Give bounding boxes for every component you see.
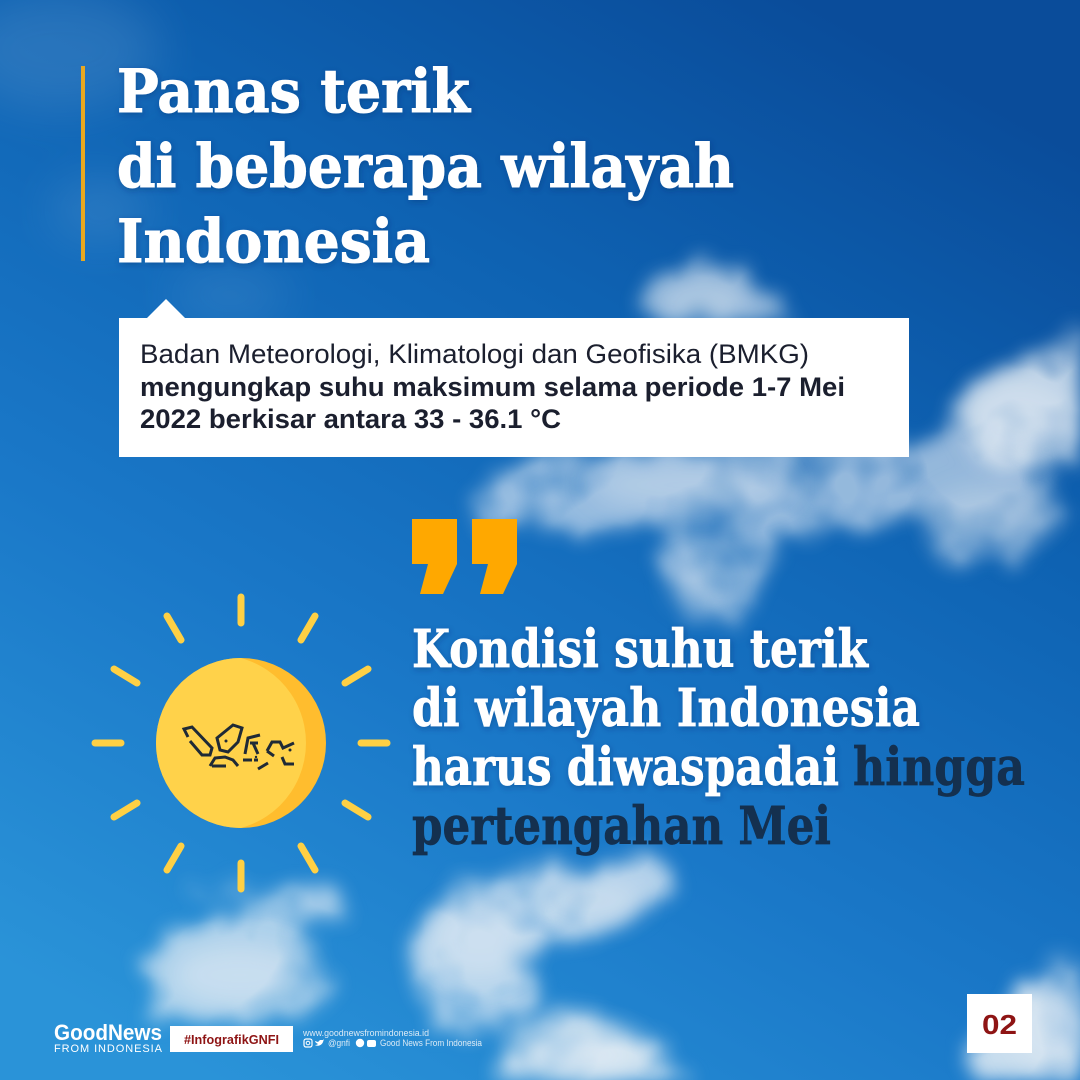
logo: GoodNews From Indonesia [54,1020,163,1055]
sun disc [156,658,326,828]
footer [54,1020,482,1055]
title [117,57,734,277]
quote text: pertengahan Mei [412,796,831,857]
hashtag badge: #InfografikGNFI [184,1032,279,1047]
logo: GoodNews From Indonesia: GoodNews [54,1020,162,1045]
callout text: Badan Meteorologi, Klimatologi dan Geofisika (BMKG) [140,339,809,369]
callout pointer [147,299,185,318]
quote text: di wilayah Indonesia [412,678,920,739]
title accent bar [81,66,85,261]
quote text: hingga [853,737,1025,798]
map dots [224,740,292,758]
sun rays [95,597,387,889]
hashtag badge [170,1026,293,1052]
logo: GoodNews From Indonesia: FROM INDONESIA [54,1043,163,1055]
website and social links: @gnfi [328,1038,350,1048]
callout text: mengungkap suhu maksimum selama periode 1-7 Mei [140,372,845,402]
quote text [412,619,1025,857]
icon: quotation marks [412,519,517,594]
title: Panas terik [117,57,471,127]
callout box [119,299,909,457]
callout panel [119,318,909,457]
page number: 02 [982,1009,1017,1040]
title: Indonesia [117,207,430,277]
title: di beberapa wilayah [117,132,734,202]
callout text [140,339,845,434]
website and social links: www.goodnewsfromindonesia.id [302,1028,429,1038]
callout text: 2022 berkisar antara 33 - 36.1 °C [140,404,561,434]
website and social links [302,1028,482,1048]
icon: sun with Indonesia map [95,597,387,889]
quote text: harus diwaspadai [412,737,839,798]
quote text: Kondisi suhu terik [412,619,869,680]
Indonesia map outline [184,725,294,769]
website and social links: Good News From Indonesia [380,1038,482,1048]
page number [967,994,1032,1053]
